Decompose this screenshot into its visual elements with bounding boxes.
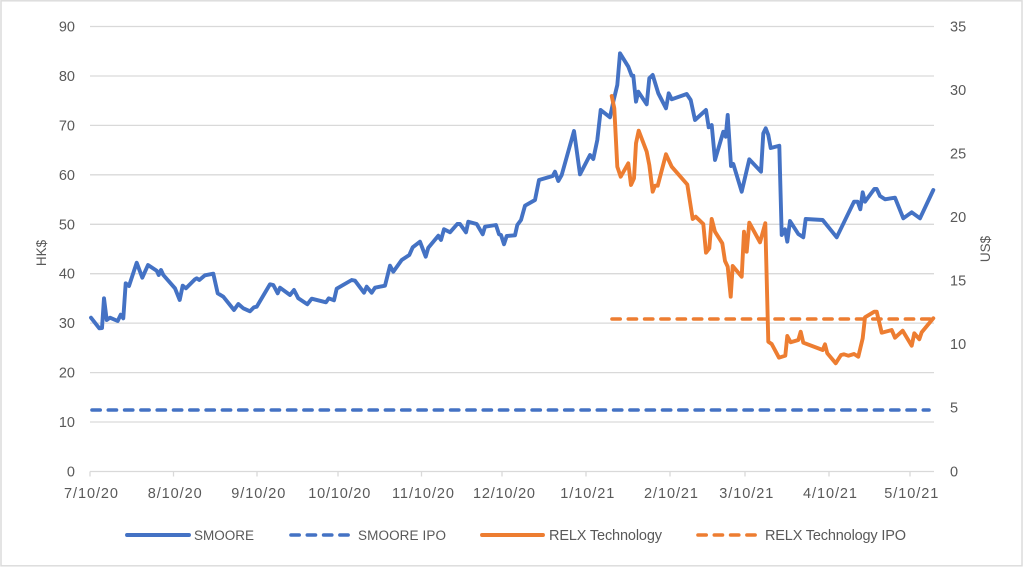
right axis labels (US$) <box>950 20 966 480</box>
right axis labels (US$): 30 <box>950 83 966 99</box>
legend: SMOORE <box>127 528 254 543</box>
x axis date labels: 7/10/20 <box>64 486 118 502</box>
left axis title: HK$ <box>34 239 49 266</box>
legend: SMOORE IPO: SMOORE IPO <box>358 528 446 543</box>
left axis labels (HK$): 50 <box>59 217 75 233</box>
left axis labels (HK$): 20 <box>59 366 75 382</box>
RELX Technology IPO dashed line <box>612 317 934 321</box>
left axis labels (HK$): 40 <box>59 267 75 283</box>
x axis date labels: 3/10/21 <box>719 486 773 502</box>
legend: RELX Technology: RELX Technology <box>549 528 663 544</box>
x axis date labels: 11/10/20 <box>392 486 454 502</box>
x axis date labels: 2/10/21 <box>644 486 698 502</box>
right axis labels (US$): 5 <box>950 401 958 417</box>
left axis labels (HK$): 80 <box>59 69 75 85</box>
right axis title: US$ <box>978 235 993 262</box>
x axis date labels: 4/10/21 <box>803 486 857 502</box>
legend: RELX Technology IPO: RELX Technology IPO <box>765 528 906 544</box>
SMOORE IPO dashed line <box>92 408 929 412</box>
left axis labels (HK$): 0 <box>67 464 75 480</box>
x axis date labels: 8/10/20 <box>148 486 202 502</box>
left axis labels (HK$): 10 <box>59 415 75 431</box>
SMOORE price line <box>91 53 933 328</box>
right axis labels (US$): 35 <box>950 20 966 36</box>
right axis labels (US$): 10 <box>950 337 966 353</box>
legend <box>127 528 906 544</box>
x axis date labels: 10/10/20 <box>308 486 370 502</box>
x axis date labels: 1/10/21 <box>560 486 614 502</box>
x axis date labels: 9/10/20 <box>231 486 285 502</box>
RELX Technology price line <box>612 96 933 363</box>
right axis labels (US$): 25 <box>950 147 966 163</box>
x axis date labels <box>64 486 938 502</box>
right axis labels (US$): 20 <box>950 210 966 226</box>
left axis labels (HK$): 60 <box>59 168 75 184</box>
left axis labels (HK$) <box>59 20 75 480</box>
x axis date labels: 12/10/20 <box>473 486 535 502</box>
left axis labels (HK$): 30 <box>59 316 75 332</box>
legend: SMOORE: SMOORE <box>194 528 254 543</box>
left axis labels (HK$): 90 <box>59 20 75 36</box>
x axis date labels: 5/10/21 <box>884 486 938 502</box>
right axis labels (US$): 0 <box>950 464 958 480</box>
left axis labels (HK$): 70 <box>59 118 75 134</box>
right axis labels (US$): 15 <box>950 274 966 290</box>
